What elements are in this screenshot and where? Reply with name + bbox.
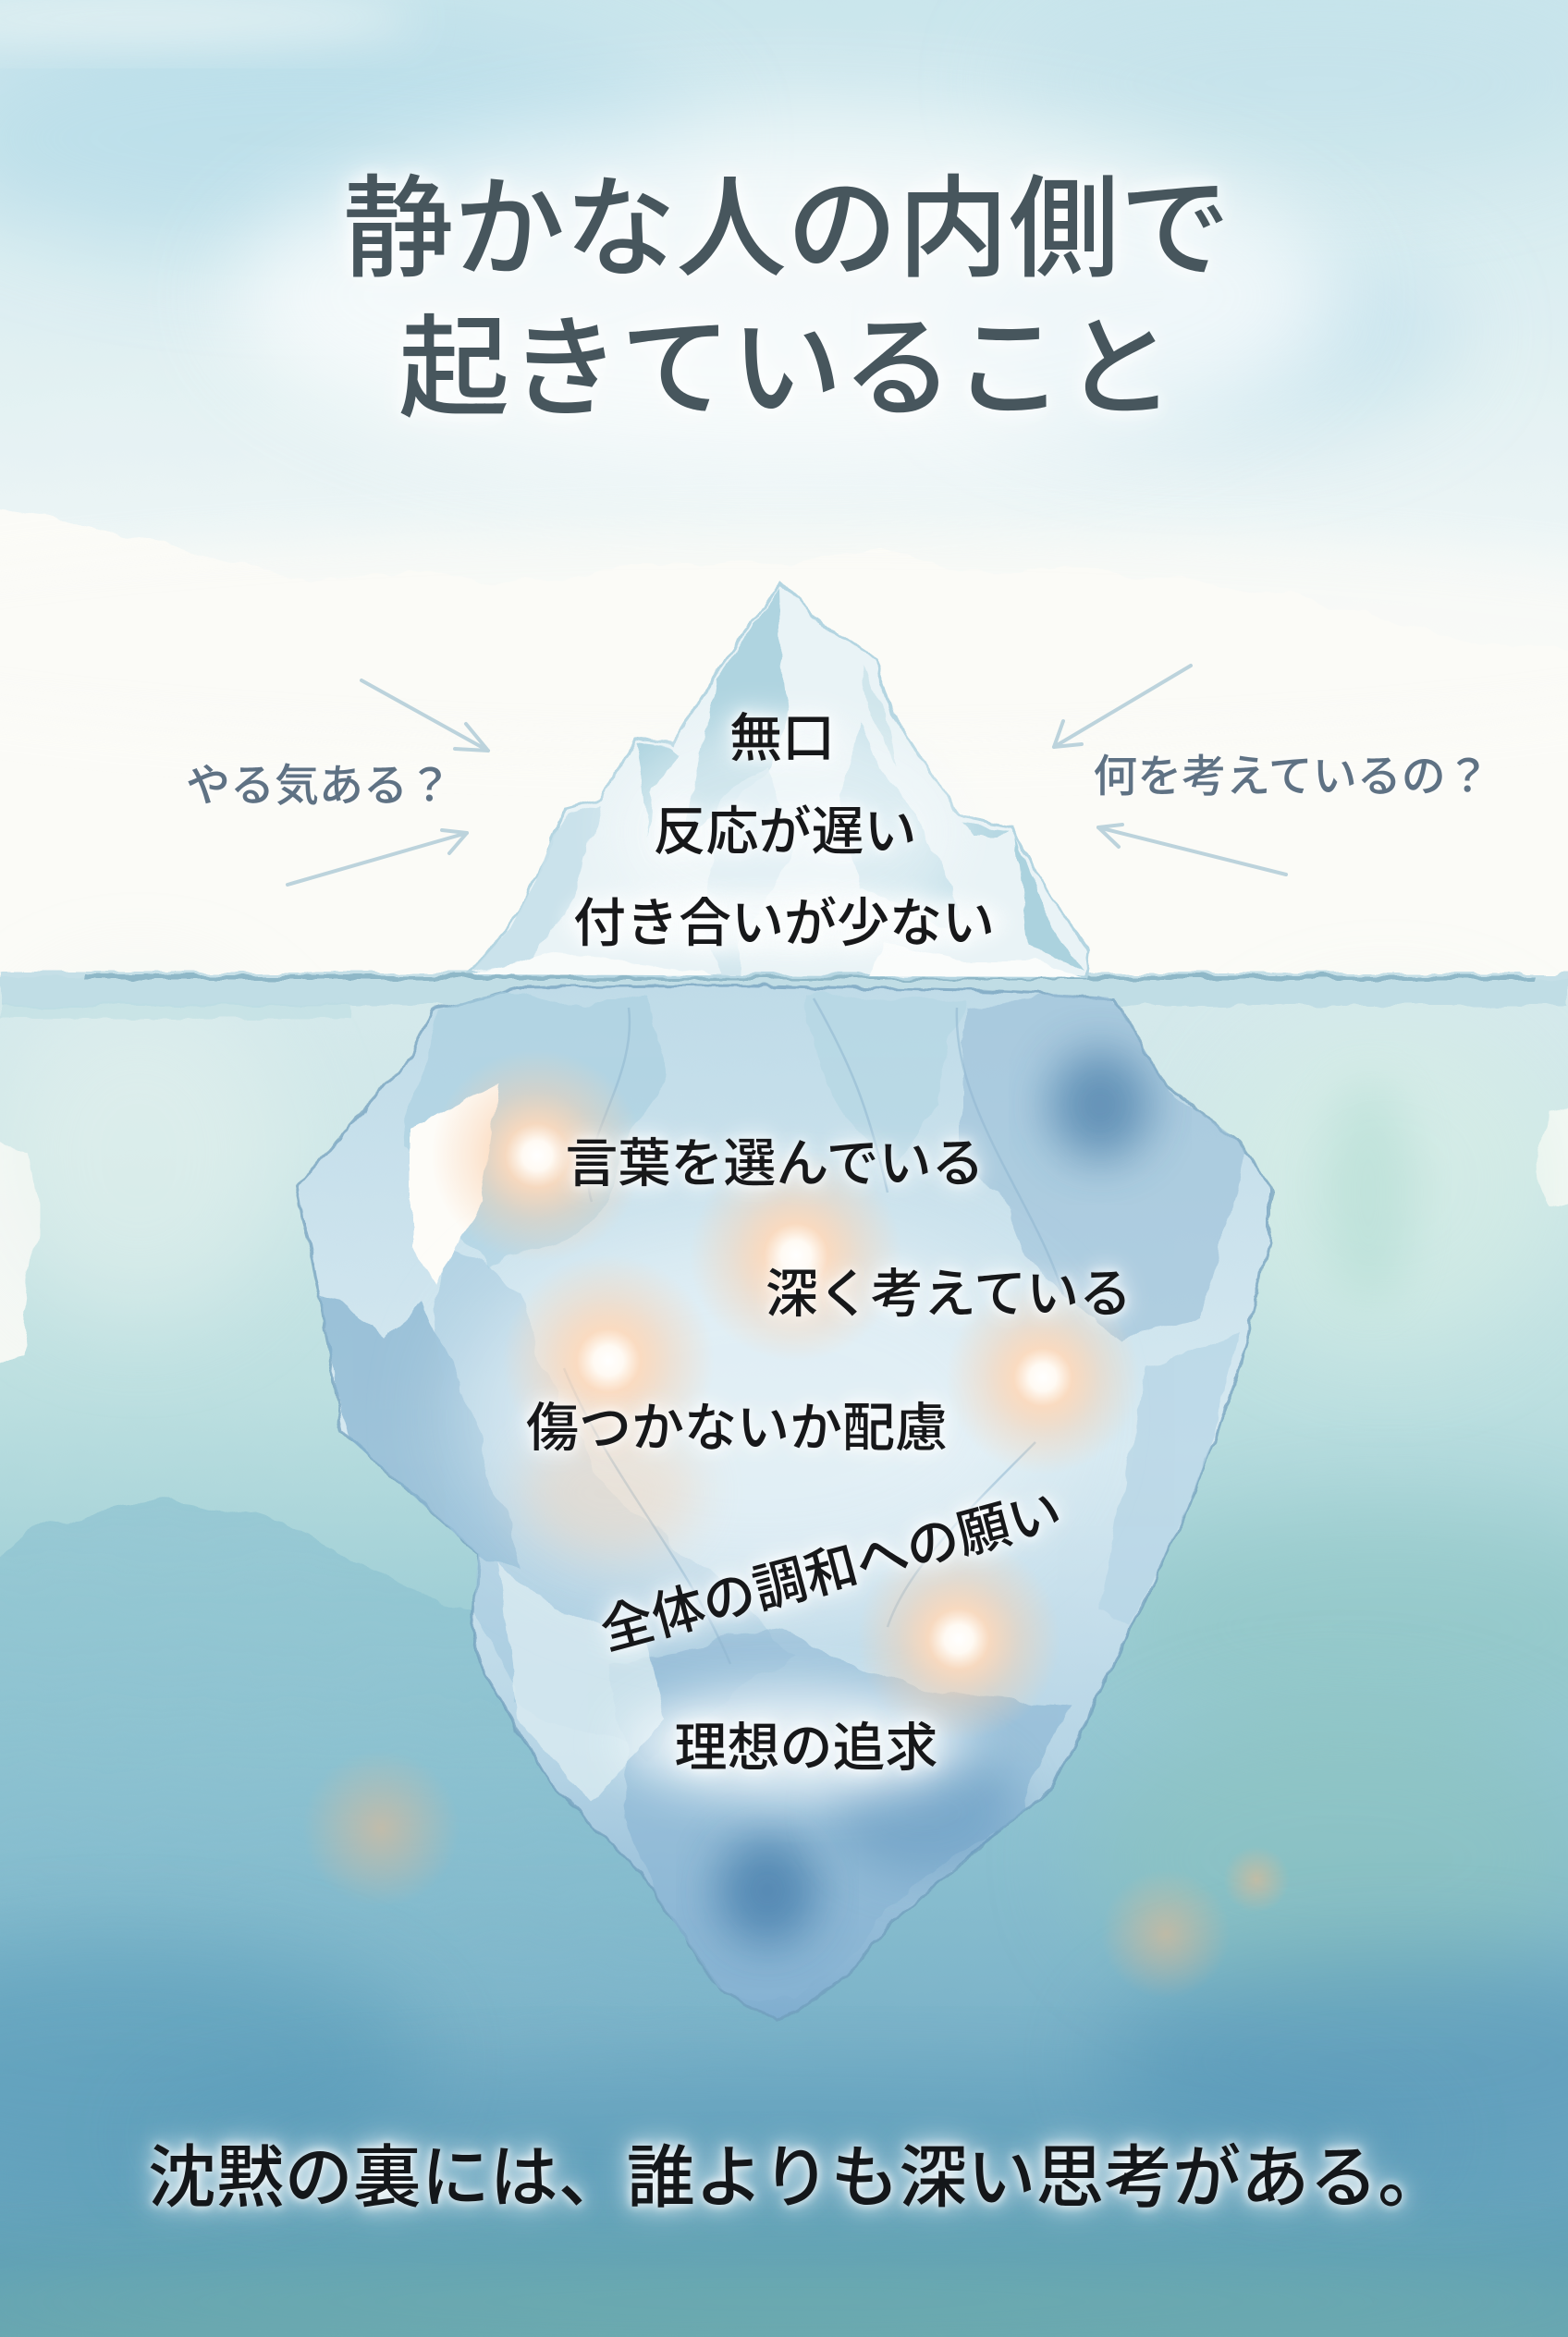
- iceberg: visible tip: [469, 584, 1088, 978]
- dim glows in water: [302, 1750, 1290, 1999]
- arrow: upper left: [361, 680, 488, 751]
- inner label: wish for harmony: 全体の調和への願い: [594, 1482, 1068, 1661]
- tip label: slow response: 反応が遅い: [653, 802, 917, 862]
- warm glows inside iceberg: [431, 1049, 1140, 1741]
- title line 2: 起きていること: [398, 307, 1175, 431]
- inner label: care not to hurt: 傷つかないか配慮: [526, 1399, 948, 1458]
- tip label: few relationships: 付き合いが少ない: [573, 894, 995, 953]
- side question: left: やる気ある？: [186, 762, 452, 811]
- arrow: upper right: [1054, 666, 1191, 747]
- veins: [564, 998, 1063, 1664]
- waterline: [0, 973, 1568, 1019]
- darker lobes: [962, 994, 1248, 1350]
- iceberg: underwater body: [297, 985, 1269, 2022]
- tip label: quiet: 無口: [729, 709, 835, 768]
- sea wash: [0, 978, 1568, 2337]
- inner label: thinking deeply: 深く考えている: [766, 1265, 1132, 1324]
- inner label: pursuit of ideals: 理想の追求: [675, 1719, 937, 1778]
- closing message: 沈黙の裏には、誰よりも深い思考がある。: [148, 2139, 1446, 2216]
- title: 静かな人の内側で: [343, 167, 1231, 291]
- pale center: [462, 1230, 1054, 1599]
- sky wash: [0, 0, 1568, 749]
- arrow: lower right: [1098, 825, 1286, 875]
- arrow: lower left: [288, 830, 467, 885]
- inner label: choosing words: 言葉を選んでいる: [565, 1134, 985, 1193]
- side question: right: 何を考えているの？: [1093, 752, 1490, 801]
